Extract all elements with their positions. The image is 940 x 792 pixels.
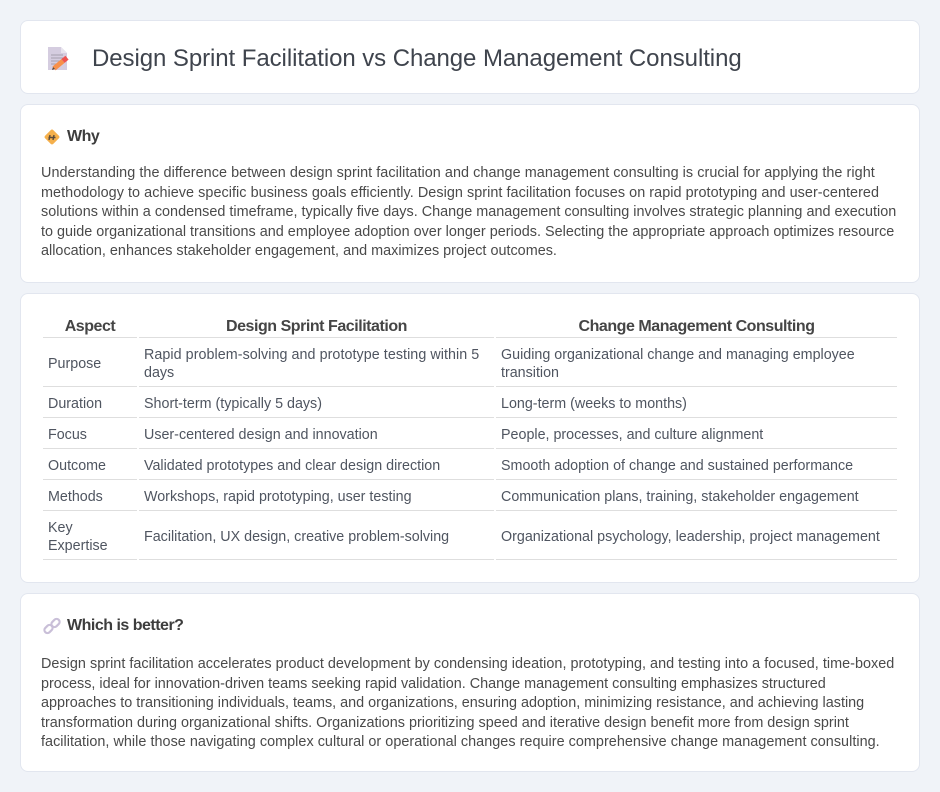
icon: diamond sign	[44, 130, 60, 144]
text block: why: solutions within a condensed timeframe, typically five days. Change management consulting involves strategic planning and execution	[41, 204, 896, 220]
row: purpose: Purpose	[48, 356, 101, 372]
row: methods: Communication plans, training, stakeholder engagement	[501, 489, 859, 505]
row: focus: Focus	[48, 427, 87, 443]
row: duration: Short-term (typically 5 days)	[144, 396, 322, 412]
text block: why	[41, 165, 896, 259]
row: focus	[48, 427, 764, 443]
row: purpose: transition	[501, 365, 559, 381]
text block: why: methodology to achieve specific business goals efficiently. Design sprint facilitation focuses on rapid prototyping and user-centered	[41, 184, 879, 200]
panel: which is better	[20, 593, 920, 772]
text block: which is better	[41, 656, 894, 750]
row: focus: User-centered design and innovation	[144, 427, 378, 443]
row: focus: People, processes, and culture alignment	[501, 427, 763, 443]
row: methods: Methods	[48, 489, 103, 505]
table header row: Design Sprint Facilitation	[226, 318, 407, 335]
row: purpose: days	[144, 365, 174, 381]
text block: which is better: approaches to transitioning individuals, teams, and organizations, ensuring adoption, minimizing resistance, and achieving lasting	[41, 695, 864, 711]
panel: title header	[20, 20, 920, 94]
row: purpose	[48, 347, 855, 381]
text block: which is better: process, ideal for innovation-driven teams seeking rapid validation. Change management consulting emphasizes structured	[41, 676, 826, 692]
title: Design Sprint Facilitation vs Change Management Consulting	[92, 45, 742, 72]
text block: why: Understanding the difference between design sprint facilitation and change management consulting is crucial for applying the right	[41, 165, 875, 181]
row: duration	[48, 396, 687, 412]
row: duration: Long-term (weeks to months)	[501, 396, 687, 412]
icon: document with pencil	[48, 47, 68, 70]
text block: which is better: facilitation, while those navigating complex cultural or operational changes require comprehensive change management consulting.	[41, 734, 880, 750]
row: duration: Duration	[48, 396, 102, 412]
row: methods: Workshops, rapid prototyping, user testing	[144, 489, 412, 505]
heading: why: Why	[67, 128, 99, 145]
row: outcome: Outcome	[48, 458, 106, 474]
row: outcome: Validated prototypes and clear design direction	[144, 458, 440, 474]
table header row: Aspect	[65, 318, 115, 335]
table header row	[65, 318, 815, 335]
row: key expertise	[48, 520, 880, 554]
row: purpose: Rapid problem-solving and prototype testing within 5	[144, 347, 479, 363]
row: methods	[48, 489, 859, 505]
row: outcome: Smooth adoption of change and sustained performance	[501, 458, 853, 474]
text block: which is better: transformation during organizational shifts. Organizations prioritizing speed and iterative design benefit more from design sprint	[41, 714, 849, 730]
table header row: Change Management Consulting	[578, 318, 815, 335]
row: outcome	[48, 458, 853, 474]
row: key expertise: Organizational psychology, leadership, project management	[501, 529, 880, 545]
panel: why	[20, 104, 920, 283]
row: key expertise: Key	[48, 520, 73, 536]
icon: chain link	[43, 618, 61, 634]
text block: why: to guide organizational transitions and employee adoption over longer periods. Selecting the appropriate approach optimizes resource	[41, 224, 894, 240]
row: purpose: Guiding organizational change and managing employee	[501, 347, 855, 363]
panel: comparison table	[20, 293, 920, 583]
row: key expertise: Expertise	[48, 538, 108, 554]
heading: which is better: Which is better?	[67, 617, 183, 634]
row: key expertise: Facilitation, UX design, creative problem-solving	[144, 529, 449, 545]
text block: why: allocation, enhances stakeholder engagement, and maximizes project outcomes.	[41, 243, 557, 259]
text block: which is better: Design sprint facilitation accelerates product development by condensing ideation, prototyping, and testing into a focused, time-boxed	[41, 656, 894, 672]
